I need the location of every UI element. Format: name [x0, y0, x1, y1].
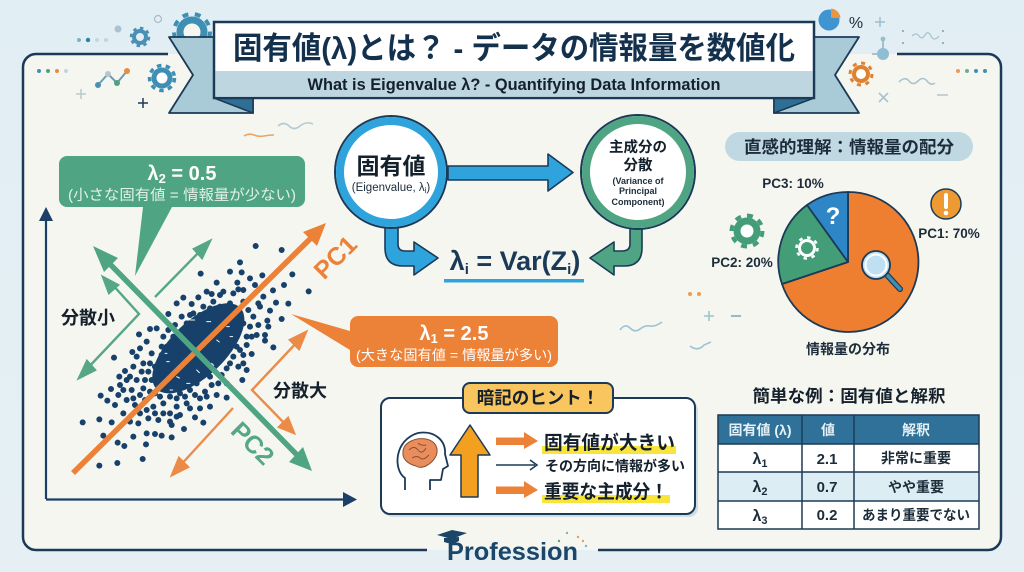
- table: eigenvalues and interpretation: 0.7: [817, 479, 837, 496]
- callout: lambda 2: (小さな固有値 = 情報量が少ない): [68, 187, 296, 204]
- hint label: 暗記のヒント！: [477, 388, 599, 408]
- circle: variance: Component): [612, 197, 664, 207]
- heading: information share: 直感的理解：情報量の配分: [744, 137, 954, 157]
- table: eigenvalues and interpretation: やや重要: [888, 479, 944, 495]
- label: PC1 share: PC1: 70%: [918, 226, 980, 241]
- callout: lambda 2: = 0.5: [166, 163, 216, 185]
- panel: memory hint: [381, 383, 698, 517]
- callout: lambda 1: = 2.5: [438, 323, 488, 345]
- decorative squiggles middle: [620, 292, 741, 349]
- arrow: eigenvalue to formula: [385, 226, 438, 275]
- label: PC1: PC1: [309, 231, 363, 285]
- circle: variance: 分散: [624, 157, 653, 174]
- hint text 2: その方向に情報が多い: [545, 458, 685, 474]
- callout: lambda 2: 2: [159, 171, 166, 186]
- circle: eigenvalue: i: [425, 186, 427, 195]
- hint label: [463, 383, 613, 413]
- callout: lambda 1: λ: [420, 323, 431, 345]
- circle: variance: [581, 115, 695, 229]
- table: eigenvalues and interpretation: 0.2: [817, 507, 837, 524]
- formula: i: [567, 261, 571, 278]
- axes: [46, 216, 350, 500]
- ribbon left tail: [169, 37, 253, 113]
- arrow: eigenvalue to variance: [448, 154, 573, 191]
- decorative icons top right: [818, 8, 987, 102]
- circle: variance: Principal: [619, 186, 657, 196]
- heading: information share: [725, 132, 973, 161]
- icon: alert: [931, 189, 961, 219]
- label: small variance: 分散小: [61, 308, 115, 328]
- decorative icons top left: [37, 14, 313, 136]
- formula: = Var(Z: [469, 246, 567, 276]
- label: large variance: 分散大: [273, 381, 327, 401]
- label: PC3: PC3: 10%: [762, 176, 824, 191]
- callout: lambda 1: (大きな固有値 = 情報量が多い): [356, 347, 552, 363]
- arrows: small variance: [79, 241, 210, 378]
- arrow: orange 2: [496, 481, 538, 498]
- icon: head with brain: [397, 433, 448, 490]
- formula: ): [571, 246, 580, 276]
- callout: lambda 2: λ: [148, 163, 159, 185]
- arrow: orange 1: [496, 432, 538, 449]
- icon: green gear: [732, 216, 762, 246]
- main title: 固有値(λ)とは？ - データの情報量を数値化: [233, 31, 795, 66]
- table: eigenvalues and interpretation: 2.1: [817, 451, 837, 468]
- data points: [83, 246, 309, 466]
- label: pie caption: 情報量の分布: [806, 341, 890, 357]
- circle: eigenvalue: ): [426, 182, 430, 194]
- arrow: PC2: [93, 246, 312, 471]
- label: PC2: PC2: [225, 417, 279, 471]
- concept flow: [335, 115, 695, 282]
- ribbon right tail: [774, 37, 859, 113]
- arrows: large variance: [172, 332, 306, 475]
- callout: lambda 1: [291, 314, 558, 367]
- circle: variance: 主成分の: [609, 138, 667, 156]
- table: eigenvalues and interpretation: 1: [761, 458, 768, 470]
- circle: eigenvalue: [335, 116, 447, 228]
- table: eigenvalues and interpretation: 3: [761, 515, 768, 527]
- subtitle: What is Eigenvalue λ? - Quantifying Data Information: [308, 76, 720, 94]
- arrow: thin: [496, 460, 537, 470]
- arrow: up: [450, 425, 490, 497]
- table: eigenvalues and interpretation: 値: [821, 422, 835, 438]
- table: eigenvalues and interpretation: λ: [752, 508, 761, 525]
- table: eigenvalues and interpretation: λ: [752, 451, 761, 468]
- table: eigenvalues and interpretation: [718, 415, 979, 529]
- icon: magnifier: [862, 251, 900, 289]
- pie chart: [778, 192, 918, 332]
- formula: λ: [450, 246, 465, 276]
- icon: question mark: ?: [826, 203, 840, 230]
- hint text 1: 固有値が大きい: [544, 431, 675, 454]
- heading: table title: 簡単な例：固有値と解釈: [752, 386, 946, 406]
- table: eigenvalues and interpretation: 2: [761, 486, 768, 498]
- arrow: PC1: [73, 223, 326, 473]
- table: eigenvalues and interpretation: 非常に重要: [881, 450, 951, 466]
- table: eigenvalues and interpretation: あまり重要でない: [862, 507, 970, 523]
- logo: Profession: Profession: [447, 538, 578, 566]
- table: eigenvalues and interpretation: λ: [752, 479, 761, 496]
- formula: i: [465, 261, 469, 278]
- label: PC2 share: PC2: 20%: [711, 255, 773, 270]
- decorative icons top right: %: [849, 15, 863, 32]
- circle: eigenvalue: 固有値: [356, 153, 426, 179]
- circle: eigenvalue: (Eigenvalue, λ: [352, 182, 425, 194]
- arrow: variance to formula: [590, 226, 642, 275]
- callout: lambda 2: [59, 156, 305, 276]
- table: eigenvalues and interpretation: 固有値 (λ): [728, 422, 792, 438]
- title banner: [169, 22, 859, 113]
- callout: lambda 1: 1: [431, 331, 438, 346]
- scatter chart: [39, 207, 363, 507]
- icon: white gear: [796, 238, 818, 258]
- logo: Profession: [437, 530, 587, 566]
- table: eigenvalues and interpretation: 解釈: [902, 422, 930, 438]
- circle: variance: (Variance of: [612, 176, 665, 186]
- hint text 3: 重要な主成分！: [544, 480, 668, 503]
